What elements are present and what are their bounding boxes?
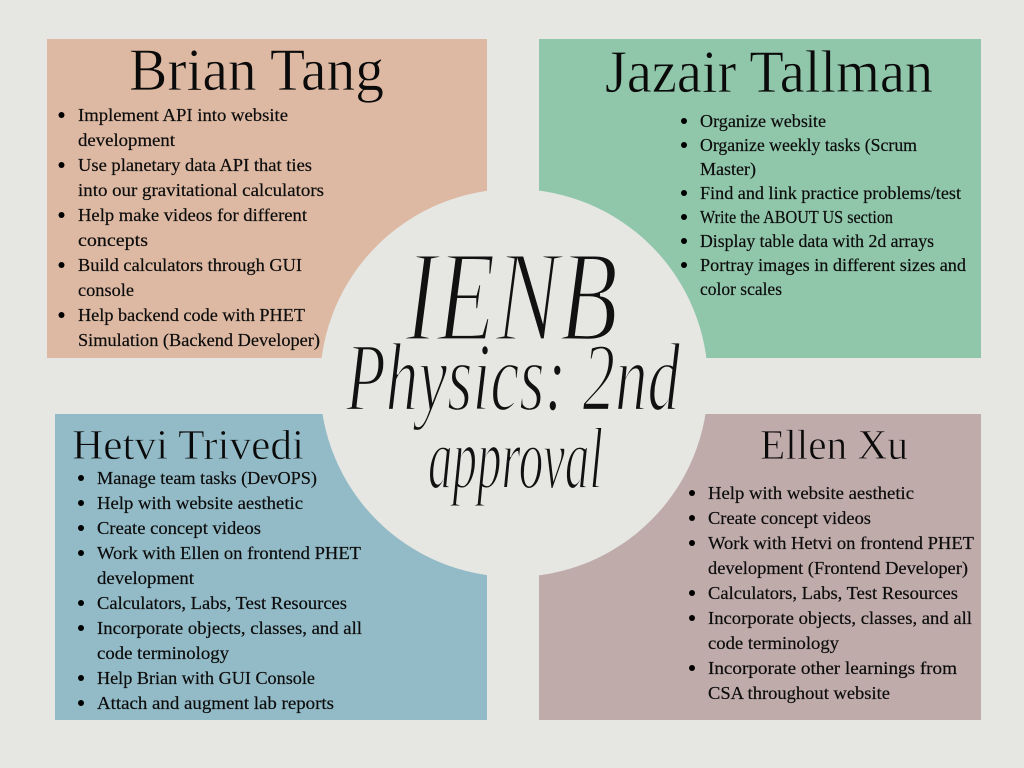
- task list: Brian Tang: [58, 105, 324, 350]
- task list: Ellen Xu: Incorporate other learnings from: [708, 658, 957, 678]
- task list: Brian Tang: console: [78, 280, 134, 300]
- task list: Hetvi Trivedi: Help Brian with GUI Console: [97, 668, 315, 688]
- task list: Hetvi Trivedi: Incorporate objects, classes, and all: [97, 618, 362, 638]
- panel: Jazair Tallman: [539, 39, 981, 358]
- task list: Brian Tang: into our gravitational calculators: [78, 180, 324, 200]
- task list: Hetvi Trivedi: Help with website aesthetic: [97, 493, 303, 513]
- panel: Ellen Xu: [539, 414, 981, 720]
- heading: Brian Tang: Brian Tang: [129, 37, 384, 103]
- panel: Brian Tang: [47, 37, 487, 358]
- task list: Jazair Tallman: Organize website: [700, 111, 826, 131]
- heading: Hetvi Trivedi: Hetvi Trivedi: [72, 423, 304, 469]
- task list: Jazair Tallman: Write the ABOUT US section: [700, 207, 893, 227]
- task list: Jazair Tallman: Display table data with 2d arrays: [700, 231, 934, 251]
- task list: Jazair Tallman: Master): [700, 159, 756, 179]
- task list: Ellen Xu: CSA throughout website: [708, 683, 890, 703]
- task list: Brian Tang: Simulation (Backend Developer): [78, 330, 320, 350]
- task list: Ellen Xu: Help with website aesthetic: [708, 483, 914, 503]
- title: IENB Physics: 2nd approval: [345, 225, 681, 508]
- center circle with script title: [320, 189, 708, 577]
- task list: Brian Tang: Build calculators through GUI: [78, 255, 302, 275]
- panel: Hetvi Trivedi: [55, 414, 487, 720]
- task list: Hetvi Trivedi: development: [97, 568, 194, 588]
- task list: Hetvi Trivedi: Create concept videos: [97, 518, 261, 538]
- task list: Hetvi Trivedi: Attach and augment lab reports: [97, 693, 334, 713]
- task list: Brian Tang: Help backend code with PHET: [78, 305, 305, 325]
- task list: Ellen Xu: Calculators, Labs, Test Resources: [708, 583, 958, 603]
- task list: Ellen Xu: development (Frontend Developer): [708, 558, 968, 578]
- heading: Ellen Xu: Ellen Xu: [760, 423, 908, 469]
- title: IENB Physics: 2nd approval: approval: [428, 411, 603, 508]
- task list: Hetvi Trivedi: code terminology: [97, 643, 229, 663]
- heading: Jazair Tallman: Jazair Tallman: [605, 39, 933, 105]
- task list: Hetvi Trivedi: [78, 468, 362, 713]
- task list: Ellen Xu: Incorporate objects, classes, and all: [708, 608, 972, 628]
- task list: Jazair Tallman: [681, 111, 966, 299]
- task list: Jazair Tallman: Portray images in different sizes and: [700, 255, 966, 275]
- task list: Brian Tang: Use planetary data API that ties: [78, 155, 312, 175]
- task list: Jazair Tallman: color scales: [700, 279, 782, 299]
- task list: Hetvi Trivedi: Manage team tasks (DevOPS): [97, 468, 317, 488]
- task list: Ellen Xu: [689, 483, 974, 703]
- title: IENB Physics: 2nd approval: IENB: [404, 225, 618, 369]
- task list: Ellen Xu: Work with Hetvi on frontend PHET: [708, 533, 974, 553]
- task list: Brian Tang: Implement API into website: [78, 105, 288, 125]
- task list: Ellen Xu: Create concept videos: [708, 508, 871, 528]
- title: IENB Physics: 2nd approval: Physics: 2nd: [345, 324, 681, 432]
- task list: Brian Tang: concepts: [78, 230, 148, 250]
- task list: Brian Tang: development: [78, 130, 175, 150]
- task list: Hetvi Trivedi: Calculators, Labs, Test Resources: [97, 593, 347, 613]
- task list: Jazair Tallman: Organize weekly tasks (Scrum: [700, 135, 917, 155]
- task list: Jazair Tallman: Find and link practice problems/test: [700, 183, 961, 203]
- task list: Brian Tang: Help make videos for different: [78, 205, 307, 225]
- task list: Ellen Xu: code terminology: [708, 633, 839, 653]
- task list: Hetvi Trivedi: Work with Ellen on frontend PHET: [97, 543, 361, 563]
